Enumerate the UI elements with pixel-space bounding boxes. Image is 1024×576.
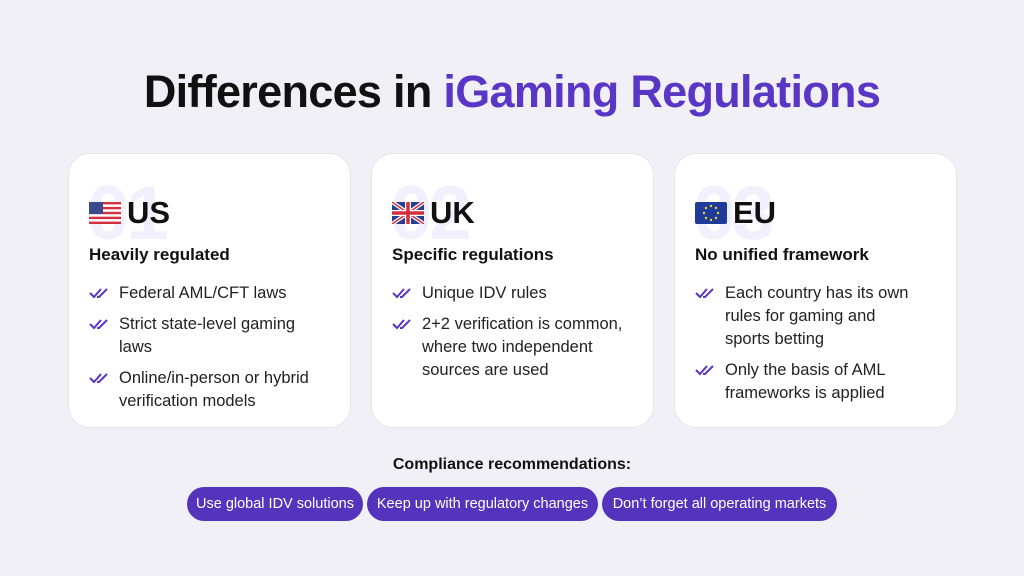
panel: US [68, 153, 351, 428]
list: Only the basis of AML frameworks is applied [725, 361, 885, 402]
number watermark: 01 [87, 171, 166, 256]
list: Each country has its own rules for gaming and sports betting [725, 284, 908, 348]
number watermark: 03 [693, 171, 772, 256]
pill: regulatory changes: Keep up with regulatory changes [377, 496, 588, 512]
heading: EU: EU [733, 195, 776, 230]
list: Strict state-level gaming laws [119, 315, 295, 356]
list: Online/in-person or hybrid verification models [119, 369, 309, 410]
recommendations heading: Compliance recommendations: [393, 456, 631, 473]
list: 2+2 verification is common, where two independent sources are used [422, 315, 622, 379]
subheading: Heavily regulated [89, 245, 230, 264]
subheading: No unified framework [695, 245, 869, 264]
list: Federal AML/CFT laws [119, 284, 286, 302]
pill: global IDV: Use global IDV solutions [196, 496, 354, 512]
heading: UK: UK [430, 195, 475, 230]
subheading: Specific regulations [392, 245, 554, 264]
panel: EU [674, 153, 957, 428]
list: Unique IDV rules [422, 284, 547, 302]
list [695, 284, 908, 402]
pill: regulatory changes [367, 487, 598, 521]
heading: US [89, 195, 170, 230]
title: Differences in iGaming Regulations [144, 66, 880, 117]
pill: global IDV [187, 487, 363, 521]
list [392, 284, 622, 379]
pill: operating markets: Don’t forget all operating markets [613, 496, 826, 512]
heading: US: US [127, 195, 170, 230]
panel: UK [371, 153, 654, 428]
heading: EU [695, 195, 776, 230]
pill: operating markets [602, 487, 837, 521]
list [89, 284, 309, 410]
heading: UK [392, 195, 475, 230]
number watermark: 02 [390, 171, 469, 256]
